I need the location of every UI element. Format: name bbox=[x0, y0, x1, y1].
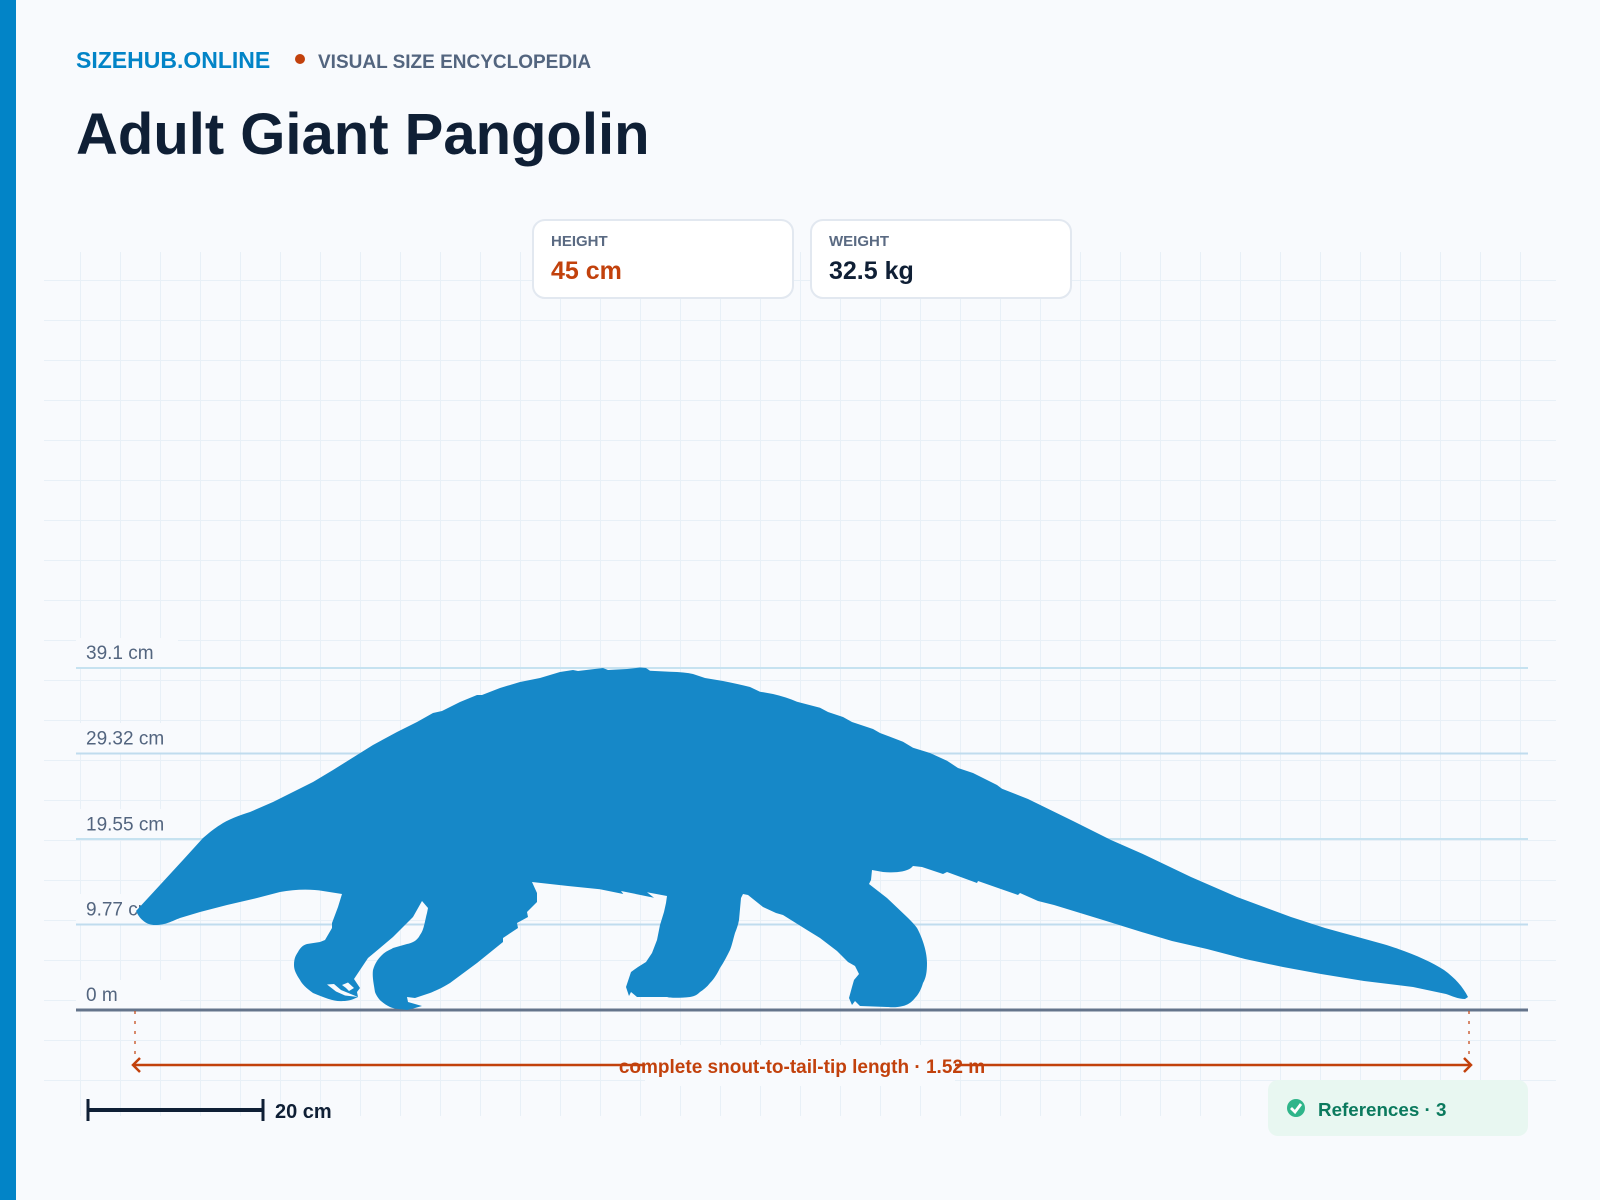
reference 29.32 cm: 29.32 cm bbox=[86, 728, 164, 750]
reference 39.1 cm bbox=[76, 638, 1528, 668]
reference 19.55 cm bbox=[76, 809, 1528, 839]
reference 29.32 cm bbox=[76, 723, 1528, 754]
length label: complete snout-to-tail-tip length · 1.52 m bbox=[619, 1057, 985, 1078]
arrow line bbox=[133, 1064, 1471, 1066]
reference 19.55 cm: 19.55 cm bbox=[86, 814, 164, 836]
stat card: weight bbox=[811, 220, 1071, 298]
length dimension bbox=[133, 1011, 1471, 1086]
arrowhead right bbox=[1464, 1058, 1471, 1072]
brand name: SIZEHUB.ONLINE bbox=[76, 47, 270, 73]
reference 0 m bbox=[76, 980, 1528, 1010]
scale bar: 20 cm bbox=[275, 1101, 332, 1123]
stat card: weight: 32.5 kg bbox=[829, 257, 914, 285]
icon: check bbox=[1287, 1099, 1305, 1117]
silhouette: giant pangolin bbox=[136, 668, 1468, 1010]
stat card: weight: WEIGHT bbox=[829, 233, 889, 250]
stat card: height: HEIGHT bbox=[551, 233, 608, 250]
reference 0 m: 0 m bbox=[86, 985, 118, 1006]
dotted guide left bbox=[134, 1011, 136, 1060]
title: Adult Giant Pangolin bbox=[76, 102, 650, 167]
references badge: References · 3 bbox=[1318, 1099, 1446, 1120]
reference 9.77 cm bbox=[76, 894, 1528, 924]
length label backing bbox=[645, 1045, 955, 1086]
tagline: VISUAL SIZE ENCYCLOPEDIA bbox=[318, 52, 591, 73]
height reference lines with labels bbox=[76, 638, 1528, 1010]
dotted guide right bbox=[1468, 1011, 1470, 1060]
reference 9.77 cm: 9.77 cm bbox=[86, 900, 154, 920]
stat card: height bbox=[533, 220, 793, 298]
reference 39.1 cm: 39.1 cm bbox=[86, 643, 154, 664]
stat card: height: 45 cm bbox=[551, 257, 622, 285]
scale bar bbox=[88, 1099, 332, 1123]
accent bar bbox=[0, 0, 16, 1200]
brand dot bbox=[295, 54, 305, 64]
arrowhead left bbox=[133, 1058, 140, 1072]
references badge bbox=[1268, 1080, 1528, 1136]
header: brand line bbox=[76, 47, 591, 73]
